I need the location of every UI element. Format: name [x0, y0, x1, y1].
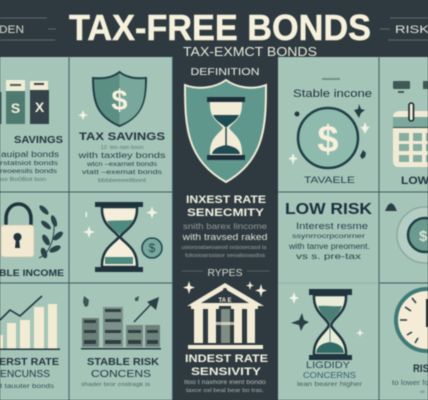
body text: 13 ·tex–tam boon [101, 145, 143, 151]
icon: calendar [393, 103, 428, 167]
icon: shield with hourglass [185, 80, 266, 182]
heading line 2: SENSIVITY [191, 366, 262, 378]
body text: shader bror cnstragk is [81, 382, 150, 388]
icon: hourglass [309, 289, 352, 360]
heading: LOW RISK [285, 201, 372, 218]
icon: clock [396, 289, 428, 351]
icon: dollar shield: $ [111, 85, 128, 117]
panel: bond boxes [0, 80, 63, 183]
panel: stable income lock [0, 204, 64, 279]
body text: reoeesils bonds [0, 168, 58, 175]
body text [288, 221, 370, 261]
panel: definition [185, 67, 266, 182]
icon: bank building: TA E [218, 298, 232, 304]
panel: stable risk concerns [81, 296, 161, 388]
body text: ssynrrocrpconrner [292, 233, 366, 240]
icon: decorative sparkles [288, 104, 370, 165]
icon: small coin: $ [149, 241, 156, 255]
caption: TAVAELE [304, 175, 355, 186]
body text: auipal bonds [1, 150, 59, 159]
heading: LIGDIDY [306, 360, 350, 370]
heading line 2: ENCUNSS [0, 369, 50, 380]
panel: hourglass [83, 202, 162, 272]
heading line 2: CONCENS [91, 369, 151, 380]
icon: tax boxes: S [11, 100, 20, 116]
small label [322, 78, 340, 80]
icon: dollar coin: $ [317, 119, 339, 161]
header band [0, 0, 428, 57]
body text: vs s. pre-tax [296, 251, 362, 261]
body text: wtcn –exarnet bonds [86, 161, 158, 168]
body text: Itoo t naxhore inent bondo [184, 380, 267, 386]
subtitle: TAX-EXMCT BONDS [183, 44, 317, 59]
panel: stable income [288, 78, 372, 186]
body text: with taxtley bonds [77, 150, 166, 160]
icon: sparkle [78, 110, 88, 120]
heading line 2: CONCERNS [303, 370, 356, 380]
title: TAX-FREE BONDS [69, 7, 371, 48]
body text: bbbbeeeeitbont [98, 178, 147, 184]
body text: usiorsoalaeoaeod orsiosecasd la [182, 245, 267, 251]
body text: with travsed raked [181, 232, 268, 242]
body text: vtatt –exemat bonds [82, 169, 163, 176]
panel: clock risk [392, 289, 428, 394]
body text [184, 380, 267, 394]
heading: Stable incone [293, 88, 372, 100]
icon: tax boxes [0, 80, 49, 124]
bar chart: interest rate [0, 296, 60, 390]
icon: sparkles [289, 292, 364, 337]
icon: dark star [291, 313, 309, 331]
body text: tolosioarssiaor seoalsoasdoa [185, 253, 266, 259]
heading: LOW [401, 175, 428, 187]
icon: sparkles [83, 206, 158, 238]
heading: INDEST RATE [185, 353, 268, 365]
icon: tax boxes: X [35, 99, 45, 115]
panel: low risk [285, 201, 372, 261]
heading: ERST RATE [0, 356, 59, 368]
icon: padlock [1, 204, 34, 257]
body text [181, 222, 268, 259]
body text: lean bearer higher [297, 381, 363, 388]
panel: liquidity concerns [289, 289, 364, 388]
body text: taxce oxl beal bear bo tras. [186, 388, 265, 394]
body text: with tanve preoment. [288, 242, 370, 251]
heading: BLE INCOME [0, 268, 64, 279]
body text [0, 150, 59, 183]
body text: snith barex lincome [183, 222, 268, 231]
icon: hourglass [95, 202, 143, 272]
icon: small marks [393, 81, 428, 93]
body text: t tauuter bonds [0, 383, 55, 390]
heading: STABLE RISK [87, 356, 159, 368]
heading: DEFINITION [190, 67, 260, 78]
body text: oo Bo0Bot bon [0, 177, 46, 183]
body text: to lower fo [392, 380, 428, 387]
body text: Interest resme [296, 221, 368, 232]
center dark panel [173, 57, 278, 400]
icon: buildings [81, 307, 161, 350]
heading: RYPES [208, 268, 243, 279]
header tab: risks: RISK [395, 24, 428, 36]
icon: laurel branch [38, 204, 64, 259]
icon: bell [385, 203, 397, 211]
icon: small marks [83, 296, 139, 307]
arrow [134, 297, 159, 322]
body text [77, 145, 166, 184]
panel: interest rate sensitivity [181, 194, 268, 259]
heading line 2: SENECMITY [187, 207, 265, 219]
heading: INXEST RATE [186, 194, 266, 206]
heading: TAX SAVINGS [79, 131, 165, 143]
panel: low calendar [393, 81, 428, 187]
footnote: ve [420, 389, 425, 394]
icon: sparkles [183, 281, 267, 297]
panel: dollar gauge [385, 203, 428, 263]
panel: types [182, 268, 270, 394]
panel: tax savings shield [77, 72, 166, 184]
heading: SAVINGS [14, 134, 63, 146]
body text: rstatsiot bonds [0, 160, 59, 167]
